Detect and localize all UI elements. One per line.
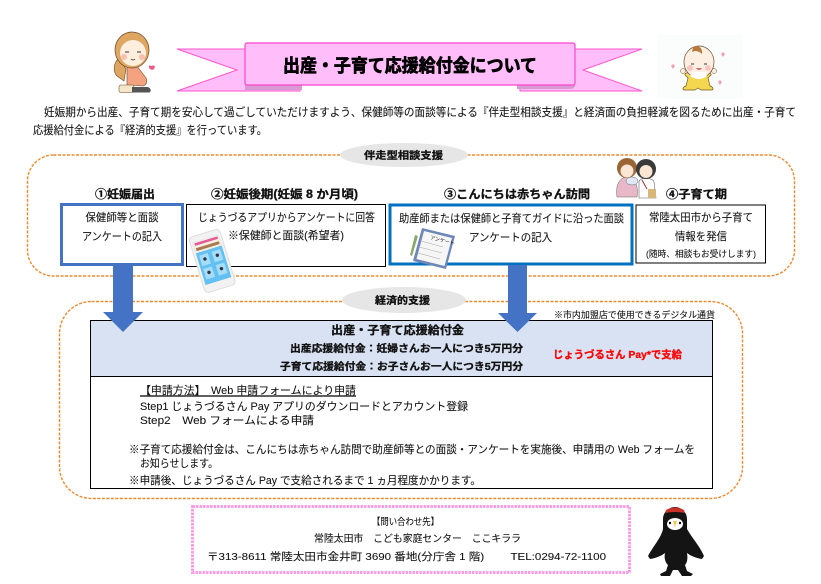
box: step 1: アンケートの記入 [82,230,162,243]
label: economic support: 経済的支援 [375,294,430,307]
benefit header: 出産応援給付金：妊婦さんお一人につき5万円分 [290,342,523,355]
icon: nurse and mother [617,158,656,198]
icon: baby [657,35,743,99]
notes: ※申請後、じょうづるさん Pay で支給されるまで 1 ヵ月程度かかります。 [129,473,481,487]
title ribbon [177,43,642,91]
step 2 heading: ②妊娠後期(妊娠 8 か月頃) [211,187,358,201]
contact box: 〒313-8611 常陸太田市金井町 3690 番地(分庁舎 1 階) TEL:0294-72-1100 [207,550,606,563]
intro text: 応援給付金による『経済的支援』を行っています。 [33,123,267,137]
panel: economic support [60,287,742,498]
arrow: step 1 to benefit [103,266,143,332]
box: step 2: じょうづるアプリからアンケートに回答 [198,210,375,224]
label: accompanying support: 伴走型相談支援 [364,149,443,162]
application method [140,383,468,427]
contact box: 【問い合わせ先】 [372,516,439,528]
step 3 heading: ③こんにちは赤ちゃん訪問 [444,187,590,201]
icon: questionnaire clipboard [410,228,455,269]
arrow: step 3 to benefit [498,265,537,332]
application method: Step1 じょうづるさん Pay アプリのダウンロードとアカウント登録 [140,399,468,413]
panel: accompanying support [28,143,794,276]
icon: smartphone app [189,229,236,293]
benefit header: 出産・子育て応援給付金 [331,323,465,337]
icon: pregnant mother [114,32,155,92]
notes: ※子育て応援給付金は、こんにちは赤ちゃん訪問で助産師等との面談・アンケートを実施後、申請用の Web フォームを [129,442,695,456]
box: step 4 [636,205,766,263]
icon: black bird mascot [648,507,704,576]
step 4 heading: ④子育て期 [666,187,727,201]
benefit header: じょうづるさん Pay*で支給 [553,348,682,361]
application method: Step2 Web フォームによる申請 [140,413,314,427]
box: step 1 [62,204,182,264]
notes [129,442,695,487]
box: step 4: 情報を発信 [675,229,727,243]
box: step 2: ※保健師と面談(希望者) [228,228,344,242]
step 1 heading: ①妊娠届出 [95,187,155,201]
label: accompanying support [340,143,468,167]
box: step 4: 常陸太田市から子育て [649,211,753,224]
intro text [33,105,796,137]
application method: 【申請方法】 Web 申請フォームにより申請 [140,383,356,397]
contact box [192,506,630,572]
intro text: 妊娠期から出産、子育て期を安心して過ごしていただけますよう、保健師等の面談等による『伴走型相談支援』と経済面の負担軽減を図るために出産・子育て [44,105,796,119]
benefit header [90,321,713,376]
title: 出産・子育て応援給付金について [283,56,537,76]
box: step 3 [390,205,632,264]
box: step 3: 助産師または保健師と子育てガイドに沿った面談 [399,211,624,225]
box: step 4: (随時、相談もお受けします) [646,248,756,259]
box: step 1: 保健師等と面談 [86,210,158,224]
label: economic support [342,287,466,313]
box: step 3: アンケートの記入 [469,231,552,244]
icon: questionnaire clipboard: アンケート [430,234,455,247]
box: step 2 [186,204,386,266]
notes: お知らせします。 [140,456,218,470]
contact box: 常陸太田市 こども家庭センター ここキララ [314,532,521,545]
benefit header: 子育て応援給付金：お子さんお一人につき5万円分 [280,360,523,373]
note: digital currency: ※市内加盟店で使用できるデジタル通貨 [554,309,715,320]
main benefit box [90,320,713,488]
